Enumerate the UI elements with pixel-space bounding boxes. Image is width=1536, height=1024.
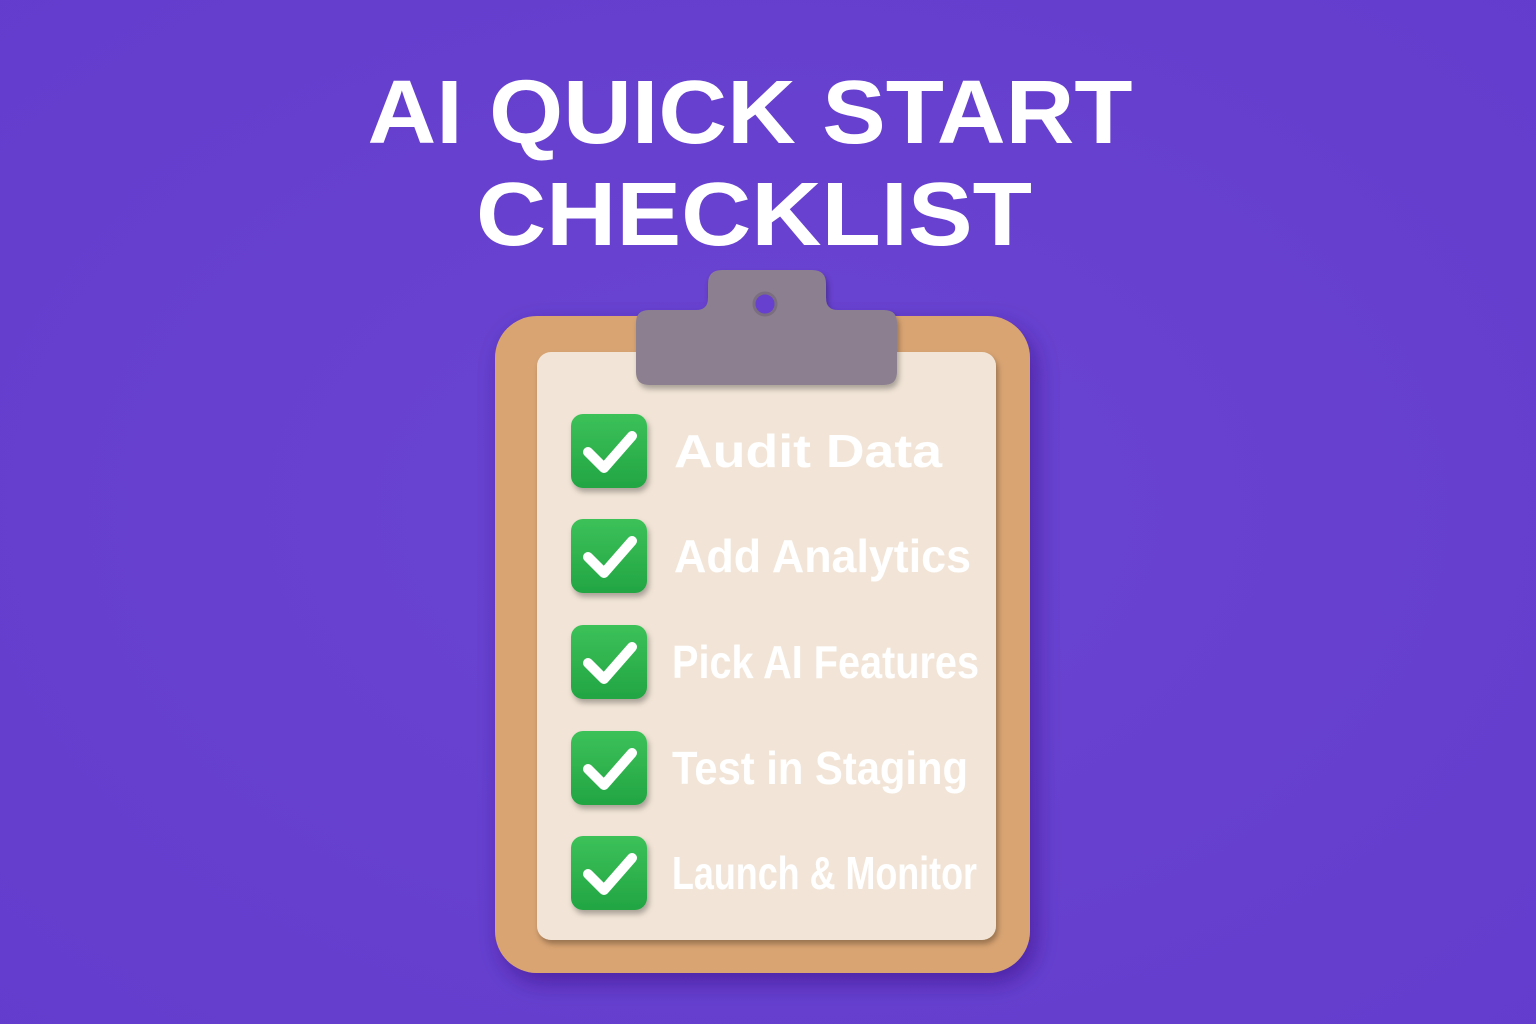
title	[368, 63, 1133, 265]
item 3: Pick AI Features	[672, 636, 979, 688]
item 2: Add Analytics	[674, 530, 971, 582]
clipboard	[495, 270, 1030, 973]
item 5	[571, 836, 977, 910]
item 1: Audit Data	[674, 425, 942, 477]
item 1	[571, 414, 942, 488]
clip	[636, 270, 897, 385]
item 2	[571, 519, 971, 593]
paper	[537, 352, 996, 940]
item 4	[571, 731, 968, 805]
board	[495, 316, 1030, 973]
title: AI QUICK START	[368, 63, 1133, 163]
item 4: Test in Staging	[672, 742, 968, 794]
item 3	[571, 625, 979, 699]
title: CHECKLIST	[476, 165, 1032, 265]
item 5: Launch & Monitor	[672, 847, 977, 899]
